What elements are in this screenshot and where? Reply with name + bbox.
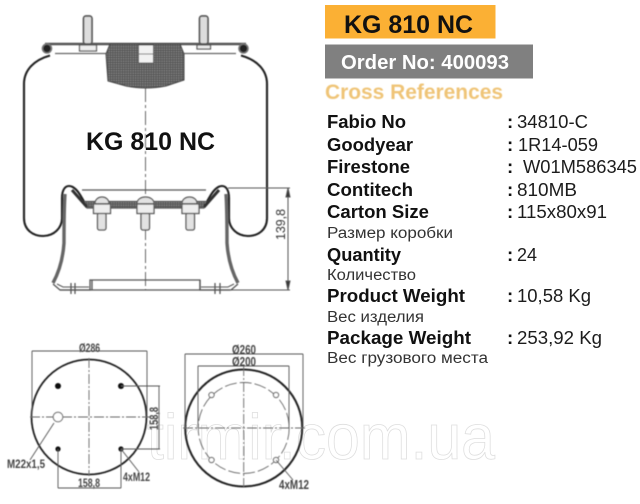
bolt holes xyxy=(209,392,279,463)
dimension labels: 158,8 xyxy=(78,476,100,490)
dimension lines xyxy=(30,351,160,488)
mounting stud right xyxy=(197,16,210,49)
row: Quantity xyxy=(327,244,537,265)
row: Package Weight xyxy=(327,327,602,348)
dimension labels: Ø260 xyxy=(232,343,256,357)
dimension labels xyxy=(7,341,161,490)
bolt circle xyxy=(198,382,289,474)
row: Quantity: : xyxy=(507,244,513,265)
row: Contitech xyxy=(327,179,577,200)
outer circle xyxy=(185,370,302,486)
bead clamps xyxy=(42,44,248,53)
dimension labels: 158,8 xyxy=(147,407,161,430)
row: Quantity: 24 xyxy=(517,245,537,265)
title badge xyxy=(325,5,496,39)
row: Goodyear: 1R14-059 xyxy=(518,135,598,155)
piston bolts xyxy=(71,197,220,294)
row: Carton Size: : xyxy=(507,201,513,222)
top plate xyxy=(45,43,246,45)
axes xyxy=(30,358,150,476)
row: Product Weight: Product Weight xyxy=(327,285,465,306)
top view plate diagram xyxy=(7,341,161,490)
height dimension xyxy=(228,188,290,290)
air inlet xyxy=(53,412,63,422)
row: Carton Size xyxy=(327,201,607,222)
row: Product Weight xyxy=(327,285,591,306)
bolt holes xyxy=(55,383,124,452)
centre axis line xyxy=(144,88,146,290)
note: carton size Russian: Размер коробки xyxy=(327,225,453,242)
row: Goodyear xyxy=(327,134,598,155)
mounting stud left xyxy=(80,16,96,51)
watermark: tirmir.com.ua xyxy=(147,401,495,473)
dimension labels: Ø286 xyxy=(79,341,100,355)
note: quantity Russian: Количество xyxy=(327,267,416,284)
dimension labels: M22x1,5 xyxy=(7,457,45,471)
row: Package Weight: : xyxy=(507,327,513,348)
row: Firestone xyxy=(327,156,637,177)
row: Fabio No xyxy=(327,111,588,132)
row: Goodyear: : xyxy=(507,134,513,155)
row: Contitech: 810MB xyxy=(517,180,577,200)
piston xyxy=(53,190,238,290)
air spring side-section drawing xyxy=(24,16,290,294)
specification table xyxy=(327,111,637,367)
dimension labels: Ø200 xyxy=(232,355,256,369)
bottom view plate diagram xyxy=(183,343,309,492)
dimension lines xyxy=(185,354,303,480)
row: Carton Size: Carton Size xyxy=(327,201,429,222)
axes xyxy=(183,366,305,487)
row: Quantity: Quantity xyxy=(327,244,402,265)
row: Contitech: : xyxy=(507,179,513,200)
row: Package Weight: 253,92 Kg xyxy=(517,328,602,348)
rubber bumper xyxy=(106,44,184,88)
row: Fabio No: Fabio No xyxy=(327,111,406,132)
height dimension label: 139,8 xyxy=(273,209,288,240)
cross references heading: Cross References xyxy=(325,81,503,104)
row: Carton Size: 115x80x91 xyxy=(517,202,607,222)
row: Firestone: : xyxy=(507,156,513,177)
drawing label: KG 810 NC xyxy=(86,128,215,156)
plate circle xyxy=(32,360,146,474)
note: product weight Russian: Вес изделия xyxy=(327,309,424,326)
order number bar: Order No: 400093 xyxy=(341,52,509,74)
row: Contitech: Contitech xyxy=(327,179,413,200)
row: Firestone: W01M586345 xyxy=(523,157,637,177)
order number bar xyxy=(325,44,533,78)
note: package weight Russian: Вес грузового места xyxy=(327,350,488,367)
row: Product Weight: 10,58 Kg xyxy=(517,286,591,306)
dimension labels: 4xM12 xyxy=(279,478,309,492)
row: Firestone: Firestone xyxy=(327,156,410,177)
row: Fabio No: 34810-C xyxy=(517,112,588,132)
title badge: KG 810 NC xyxy=(344,11,473,39)
dimension labels: 4xM12 xyxy=(123,470,150,484)
row: Goodyear: Goodyear xyxy=(327,134,413,155)
row: Fabio No: : xyxy=(507,111,513,132)
row: Product Weight: : xyxy=(507,285,513,306)
dimension labels xyxy=(232,343,309,492)
row: Package Weight: Package Weight xyxy=(327,327,471,348)
bellows outline xyxy=(24,56,86,236)
